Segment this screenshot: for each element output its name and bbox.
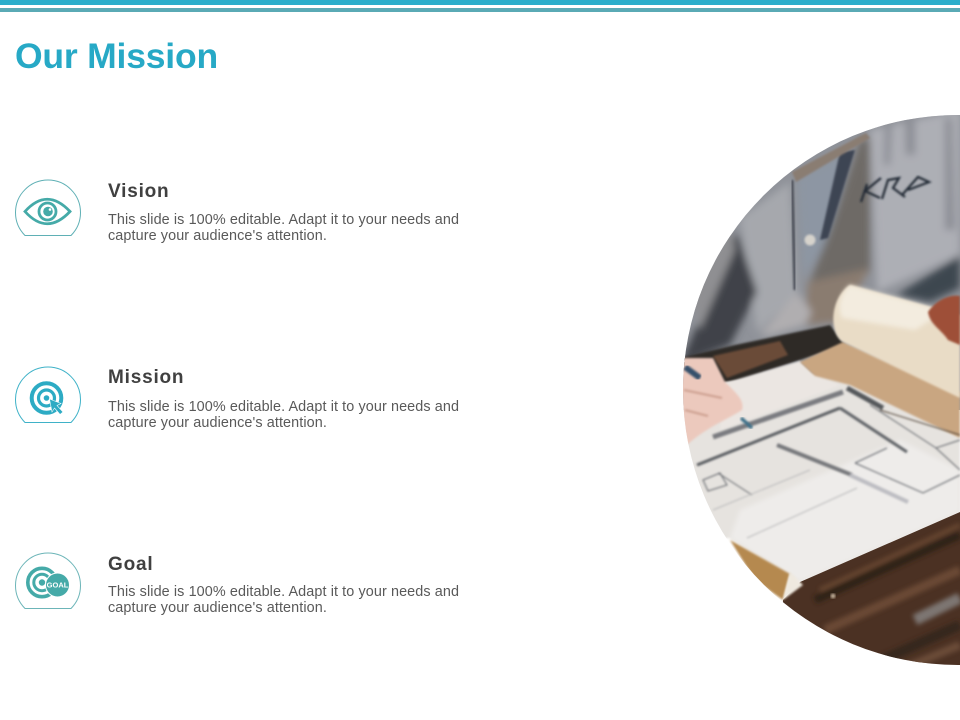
dark table [684, 324, 844, 382]
KRA logo [861, 177, 929, 202]
photo: hands over architectural blueprint in circle [683, 115, 960, 665]
text: Mission description: This slide is 100% editable. Adapt it to your needs and [108, 399, 459, 415]
white drawing sheet [680, 372, 960, 582]
paper roll [833, 285, 960, 398]
wood table foreground [780, 512, 960, 670]
heading: Goal: Goal [108, 554, 153, 575]
text: Goal description: This slide is 100% editable. Adapt it to your needs and [108, 584, 459, 600]
title: Our Mission [15, 36, 218, 76]
text: Goal description [108, 584, 459, 616]
heading: Vision: Vision [108, 181, 169, 202]
text: Mission description [108, 399, 459, 431]
text: Vision description: capture your audience's attention. [108, 228, 327, 244]
text: Vision description [108, 212, 459, 244]
wooden sheet edge [730, 540, 790, 600]
top double rule [0, 0, 960, 12]
blueprint lines [697, 388, 960, 538]
tan paper region [800, 342, 960, 438]
heading: Mission: Mission [108, 367, 184, 388]
text: Goal description: capture your audience's attention. [108, 600, 327, 616]
shirt shading [680, 110, 960, 365]
icon: goal badge in dome: GOAL [47, 581, 69, 590]
icon: target with arrow in dome [15, 366, 81, 423]
hand left with pen [680, 358, 743, 445]
hand right [928, 296, 960, 345]
icon: eye in dome [15, 180, 81, 236]
text: Vision description: This slide is 100% editable. Adapt it to your needs and [108, 212, 459, 228]
icon: goal badge in dome [15, 552, 81, 609]
text: Mission description: capture your audience's attention. [108, 415, 327, 431]
